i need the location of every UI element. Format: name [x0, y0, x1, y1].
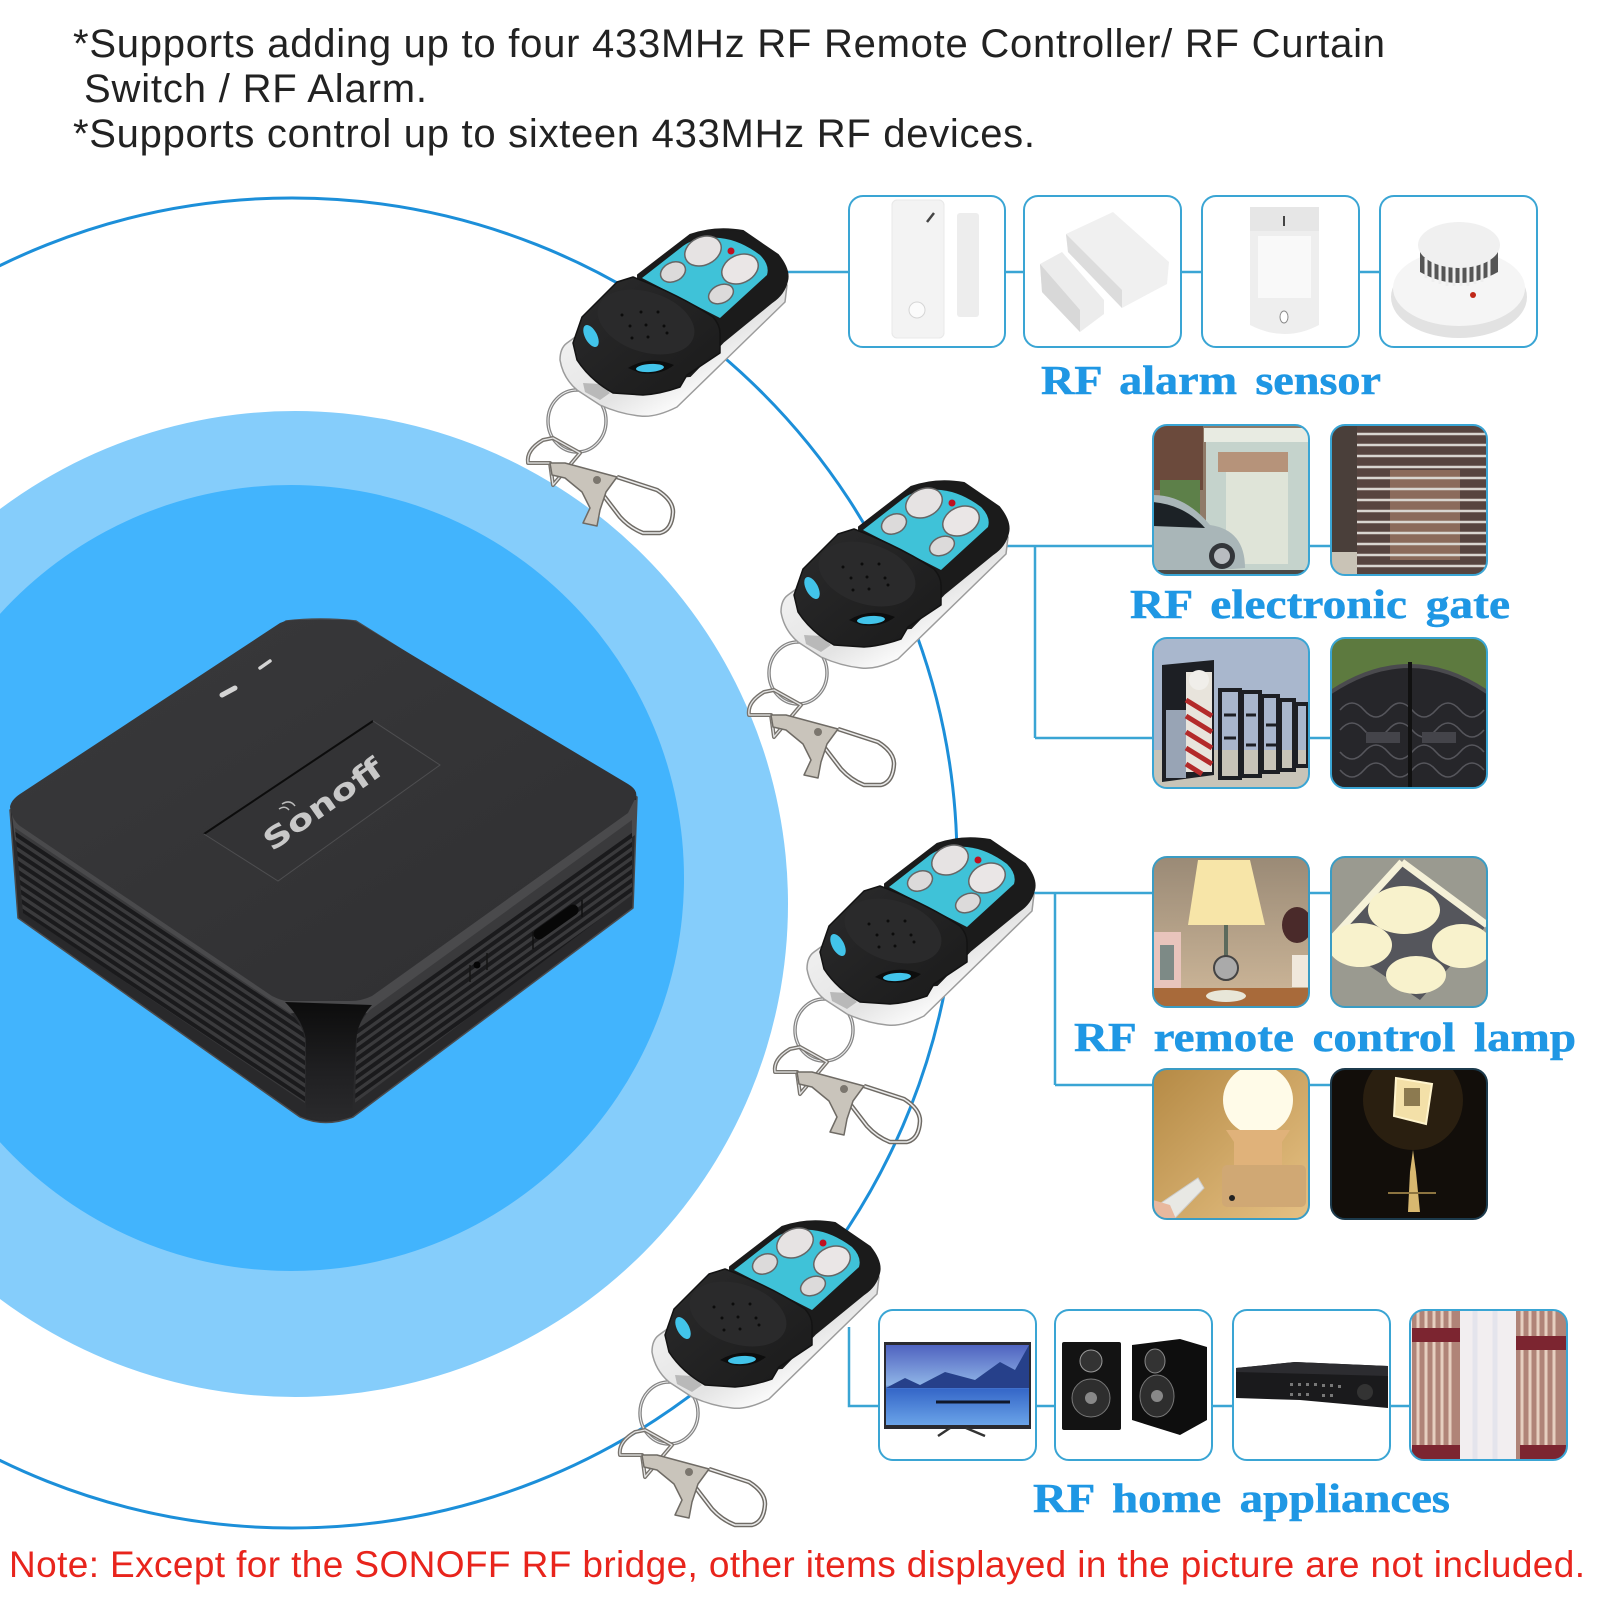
panel: rf alarm sensor cards: [849, 196, 1537, 347]
card: speakers: [1055, 1310, 1212, 1460]
card: pir sensor: [1202, 196, 1359, 347]
remote control 3: [775, 838, 1035, 1142]
top description text: *Supports control up to sixteen 433MHz RF devices.: [73, 112, 1035, 156]
heading: RF home appliances: RF home appliances: [1033, 1475, 1450, 1521]
outer orbit circle: [0, 198, 957, 1528]
status leds: [222, 661, 270, 695]
heading: RF remote control lamp: RF remote control lamp: [1074, 1014, 1576, 1060]
panel: rf home appliances cards: [879, 1310, 1567, 1460]
light blue circle: [0, 411, 788, 1397]
top description text: [73, 22, 1385, 156]
ribs right: [355, 833, 632, 1103]
ribs left: [15, 832, 305, 1102]
sonoff bridge device: [0, 619, 645, 1127]
remote control 2: [749, 481, 1009, 785]
top description text: *Supports adding up to four 433MHz RF Remote Controller/ RF Curtain: [73, 22, 1385, 66]
medium blue circle: [0, 485, 684, 1271]
card: smoke detector: [1380, 196, 1537, 347]
photo: led corn light: [1332, 1070, 1486, 1218]
heading: RF electronic gate: RF electronic gate: [1130, 581, 1510, 627]
card: television: [879, 1310, 1036, 1460]
connector lines: [786, 272, 1537, 1406]
sonoff logo: [257, 750, 390, 858]
reset hole: [470, 953, 487, 982]
photo: ceiling lamp: [1328, 857, 1492, 1007]
sonoff logo: Sonoff: [257, 750, 390, 858]
card: video recorder: [1233, 1310, 1390, 1460]
photo: wrought iron gate: [1331, 638, 1487, 788]
heading: RF alarm sensor: RF alarm sensor: [1041, 357, 1381, 403]
label panel: [204, 721, 440, 881]
remote control 1: [528, 229, 788, 533]
card: curtain: [1410, 1310, 1567, 1460]
panel: rf remote control lamp photos: [1153, 857, 1492, 1219]
remote control 4: [620, 1221, 880, 1525]
device body: [10, 619, 637, 1122]
top description text: Switch / RF Alarm.: [84, 67, 427, 111]
top face: [10, 620, 636, 1001]
photo: table lamp: [1153, 857, 1312, 1007]
card: magnetic contacts: [1024, 196, 1181, 347]
panel: rf electronic gate photos: [1153, 425, 1487, 788]
note: Note: Except for the SONOFF RF bridge, other items displayed in the picture are not included.: [9, 1544, 1585, 1585]
usb port: [533, 900, 582, 949]
photo: garage door: [1153, 425, 1309, 575]
photo: retractable gate: [1153, 638, 1309, 788]
corner pillar: [285, 1002, 372, 1120]
card: door sensor: [849, 196, 1005, 347]
photo: shutter: [1331, 425, 1487, 575]
photo: globe bulb with remote: [1153, 1065, 1309, 1219]
